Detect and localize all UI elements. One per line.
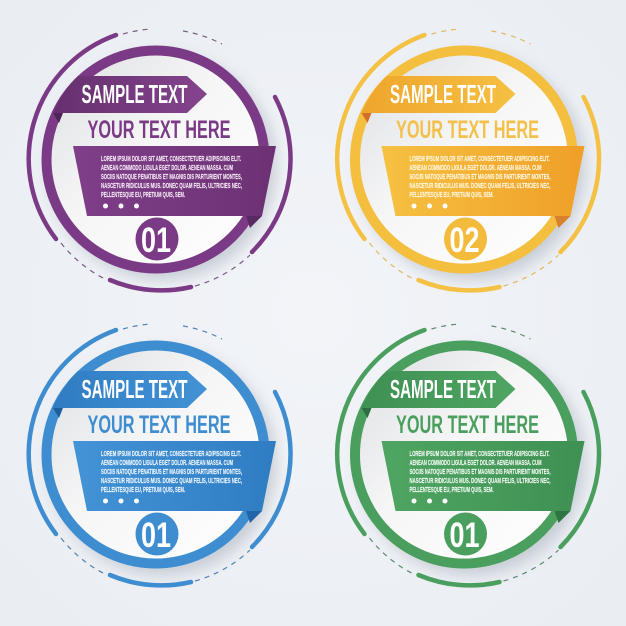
text panel bbox=[382, 146, 584, 216]
panel: green badge 01 bbox=[337, 324, 599, 585]
body text: LOREM IPSUM DOLOR SIT AMET, CONSECTETUER ADIPISCING ELIT. bbox=[101, 449, 241, 458]
coloured ring disc bbox=[355, 50, 573, 268]
heading: sample text: SAMPLE TEXT bbox=[82, 374, 188, 404]
dots bbox=[412, 498, 448, 504]
coloured ring disc bbox=[46, 346, 264, 564]
outer arcs bbox=[29, 330, 291, 585]
number badge: 02 bbox=[450, 221, 480, 260]
coloured ring disc bbox=[46, 50, 264, 268]
text panel bbox=[382, 441, 584, 511]
ribbon banner bbox=[362, 371, 516, 408]
ribbon banner bbox=[53, 76, 207, 113]
heading: your text here: YOUR TEXT HERE bbox=[396, 411, 539, 439]
body text: LOREM IPSUM DOLOR SIT AMET, CONSECTETUER ADIPISCING ELIT. bbox=[101, 154, 241, 163]
dashed arcs bbox=[61, 324, 250, 581]
text panel bbox=[73, 146, 276, 216]
heading: sample text: SAMPLE TEXT bbox=[82, 79, 188, 109]
outer arcs bbox=[337, 35, 599, 290]
panel fold bbox=[554, 511, 570, 523]
ribbon fold bbox=[53, 408, 63, 418]
heading: your text here: YOUR TEXT HERE bbox=[88, 411, 230, 439]
disc shadow bbox=[50, 54, 276, 280]
ribbon fold bbox=[53, 113, 63, 123]
panel fold bbox=[246, 216, 262, 228]
heading: sample text: SAMPLE TEXT bbox=[390, 374, 496, 404]
panel fold bbox=[554, 216, 570, 228]
panel: blue badge 01 bbox=[29, 324, 291, 585]
body text bbox=[101, 449, 242, 494]
body text: SOCIIS NATOQUE PENATIBUS ET MAGNIS DIS PARTURIENT MONTES, bbox=[101, 467, 242, 476]
panel fold bbox=[246, 511, 262, 523]
body text: PELLENTESQUE EU, PRETIUM QUIS, SEM. bbox=[101, 190, 185, 199]
body text bbox=[410, 154, 550, 199]
outer arcs bbox=[337, 330, 599, 585]
disc shadow bbox=[50, 349, 276, 575]
body text bbox=[410, 449, 550, 494]
body text: AENEAN COMMODO LIGULA EGET DOLOR. AENEAN MASSA. CUM bbox=[101, 163, 233, 172]
heading: sample text: SAMPLE TEXT bbox=[390, 79, 496, 109]
disc shadow bbox=[358, 349, 584, 575]
panel: purple badge 01 bbox=[29, 29, 291, 290]
body text: SOCIIS NATOQUE PENATIBUS ET MAGNIS DIS PARTURIENT MONTES, bbox=[101, 172, 242, 181]
ribbon banner bbox=[53, 371, 207, 408]
number badge: 01 bbox=[141, 221, 171, 260]
body text: PELLENTESQUE EU, PRETIUM QUIS, SEM. bbox=[410, 485, 494, 494]
outer arcs bbox=[29, 35, 291, 290]
heading: your text here: YOUR TEXT HERE bbox=[88, 116, 230, 144]
dots bbox=[412, 204, 448, 208]
body text: NASCETUR RIDICULUS MUS. DONEC QUAM FELIS, ULTRICIES NEC, bbox=[101, 476, 242, 485]
disc shadow bbox=[358, 54, 584, 280]
body text bbox=[101, 154, 242, 199]
heading: your text here: YOUR TEXT HERE bbox=[396, 116, 539, 144]
ribbon fold bbox=[362, 113, 372, 123]
number badge: 01 bbox=[141, 516, 171, 555]
coloured ring disc bbox=[355, 346, 573, 564]
body text: NASCETUR RIDICULUS MUS. DONEC QUAM FELIS, ULTRICIES NEC, bbox=[101, 181, 242, 190]
dashed arcs bbox=[370, 324, 558, 581]
body text: PELLENTESQUE EU, PRETIUM QUIS, SEM. bbox=[101, 485, 185, 494]
panel: yellow badge 02 bbox=[337, 29, 599, 290]
text panel bbox=[73, 441, 276, 511]
dashed arcs bbox=[370, 29, 558, 286]
dots bbox=[103, 498, 139, 504]
dots bbox=[103, 204, 139, 208]
dashed arcs bbox=[61, 29, 250, 286]
body text: PELLENTESQUE EU, PRETIUM QUIS, SEM. bbox=[410, 190, 494, 199]
number badge: 01 bbox=[450, 516, 480, 555]
ribbon fold bbox=[362, 408, 372, 418]
body text: AENEAN COMMODO LIGULA EGET DOLOR. AENEAN MASSA. CUM bbox=[101, 458, 233, 467]
ribbon banner bbox=[362, 76, 516, 113]
